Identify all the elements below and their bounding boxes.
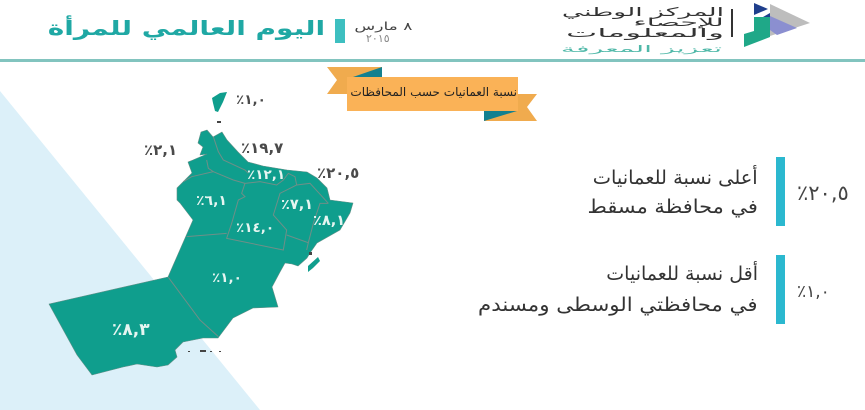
label: Wusta: ٪١,٠ [212,270,242,286]
Masirah island [308,257,320,272]
mainland outline [49,130,353,375]
stat bar [776,255,785,324]
label: North Sharqiyah: ٪٧,١ [281,197,313,213]
label: Dhofar: ٪٨,٣ [112,320,150,340]
label: Muscat: ٪٢٠,٥ [317,164,359,182]
icon: logo mark [744,3,810,47]
logo text line 2: للإحصاء [634,16,724,29]
islet north [217,121,221,123]
stat text line 1: أعلى نسبة للعمانيات [593,167,758,189]
date line: ٨ مارس [354,20,412,33]
ribbon text: نسبة العمانيات حسب المحافظات [350,85,517,99]
label: Musandam: ٪١,٠ [236,92,266,108]
logo divider [731,9,733,37]
stat: highest [588,157,849,226]
logo wordmark [561,5,724,55]
label: Dakhiliyah: ٪١٤,٠ [236,220,274,236]
stat: lowest [479,255,830,324]
year line: ٢٠١٥ [366,32,390,45]
logo text line 1: المركز الوطني [562,5,724,19]
label: Dhahirah: ٪٦,١ [196,193,227,209]
logo text line 3: والمعلومات [566,26,724,40]
stat text line 2: في محافظتي الوسطى ومسندم [479,294,758,316]
label: South Batinah: ٪١٢,١ [247,167,285,183]
title: اليوم العالمي للمرأة [48,16,325,40]
stat bar [776,157,785,226]
stat text line 1: أقل نسبة للعمانيات [606,263,758,285]
label: Buraimi: ٪٢,١ [144,141,177,159]
header divider line [0,59,865,62]
logo tagline: تعزيز المعرفة [561,45,722,55]
title accent bar [335,19,345,43]
region: Musandam [212,92,227,112]
ribbon shapes [327,67,537,121]
date text [354,20,412,45]
region borders [168,137,328,337]
label: North Batinah: ٪١٩,٧ [241,139,283,157]
ribbon heading [327,67,537,121]
stat value: ٪٢٠,٥ [797,181,849,205]
small dark coastal marks [188,252,312,352]
stat value: ٪١,٠ [797,282,830,302]
stat text line 2: في محافظة مسقط [588,196,758,218]
label: South Sharqiyah: ٪٨,١ [313,213,345,229]
